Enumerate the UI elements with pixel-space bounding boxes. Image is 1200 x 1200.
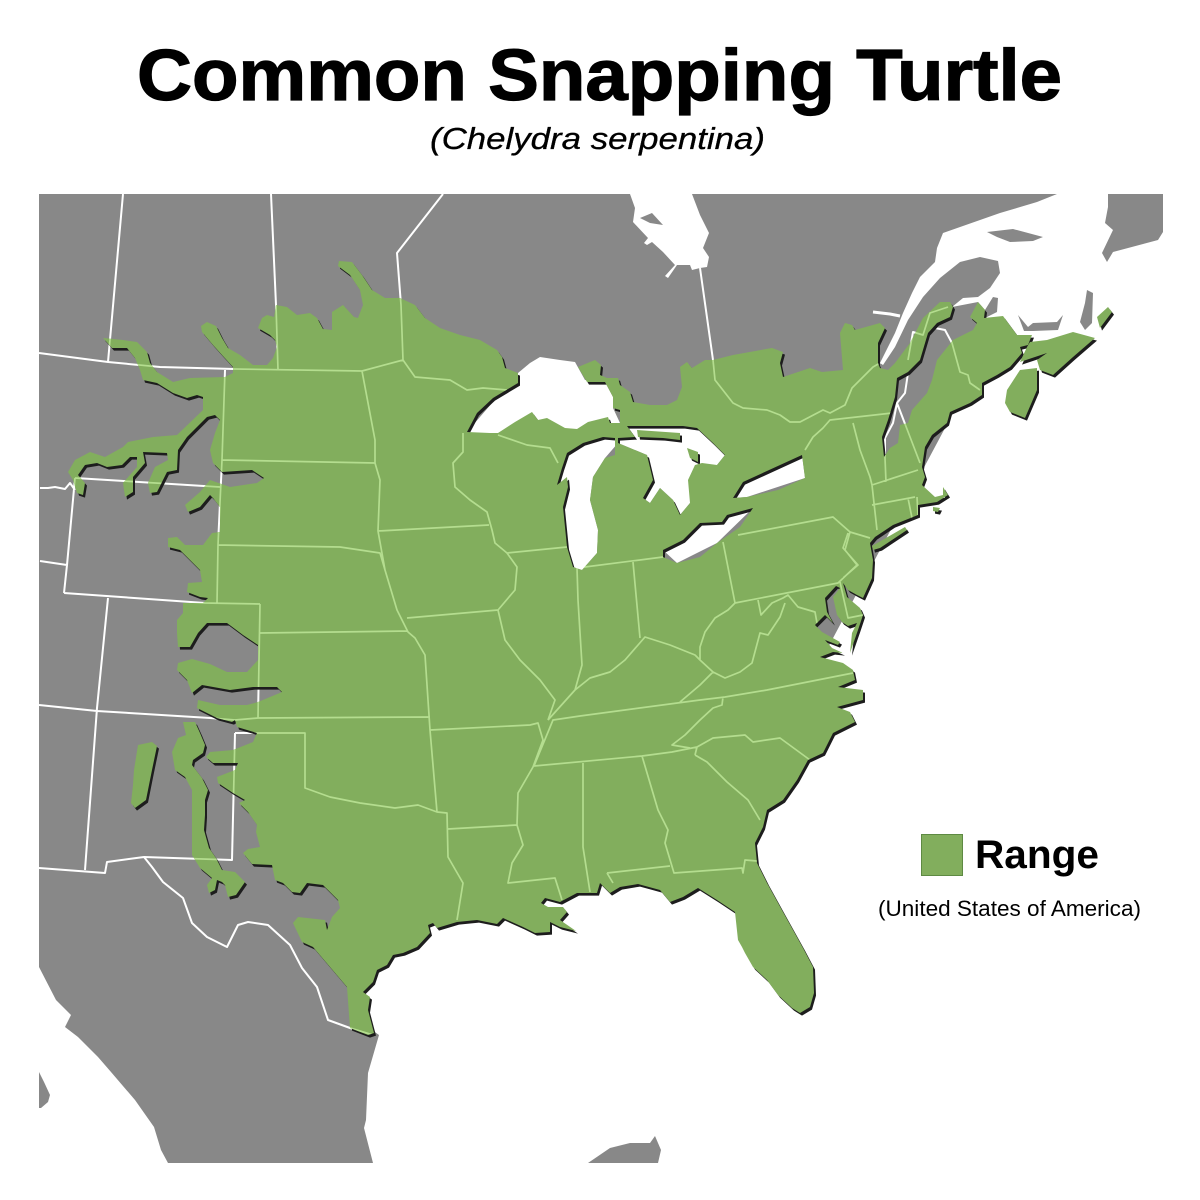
- legend note: (United States of America): [878, 896, 1141, 921]
- legend: [878, 833, 1141, 921]
- land: North America base: [39, 194, 1057, 1163]
- title: Common Snapping Turtle: [137, 36, 1062, 116]
- subtitle: (Chelydra serpentina): [430, 121, 765, 156]
- land: Anticosti Island: [987, 229, 1043, 242]
- legend swatch: [922, 834, 962, 876]
- water: Lake Winnipeg: [630, 194, 709, 278]
- water: Lake Superior: [467, 357, 620, 440]
- land: Prince Edward Island: [1018, 315, 1063, 331]
- range shadow: [70, 264, 1114, 1038]
- land: island in Lake Winnipeg: [640, 213, 663, 225]
- range: snapping turtle distribution: [68, 261, 1112, 1035]
- land: Cape Breton: [1080, 290, 1093, 330]
- land: Baja California: [39, 1072, 50, 1108]
- map: [39, 194, 1163, 1163]
- state lines within range: [74, 298, 980, 1035]
- water: Saguenay River: [873, 312, 900, 316]
- water: lower Great Lakes: [557, 426, 805, 570]
- land: Newfoundland: [1102, 194, 1163, 262]
- borders: white political boundaries: [39, 194, 980, 1035]
- legend label: Range: [975, 833, 1099, 877]
- land: Yucatan: [588, 1136, 661, 1163]
